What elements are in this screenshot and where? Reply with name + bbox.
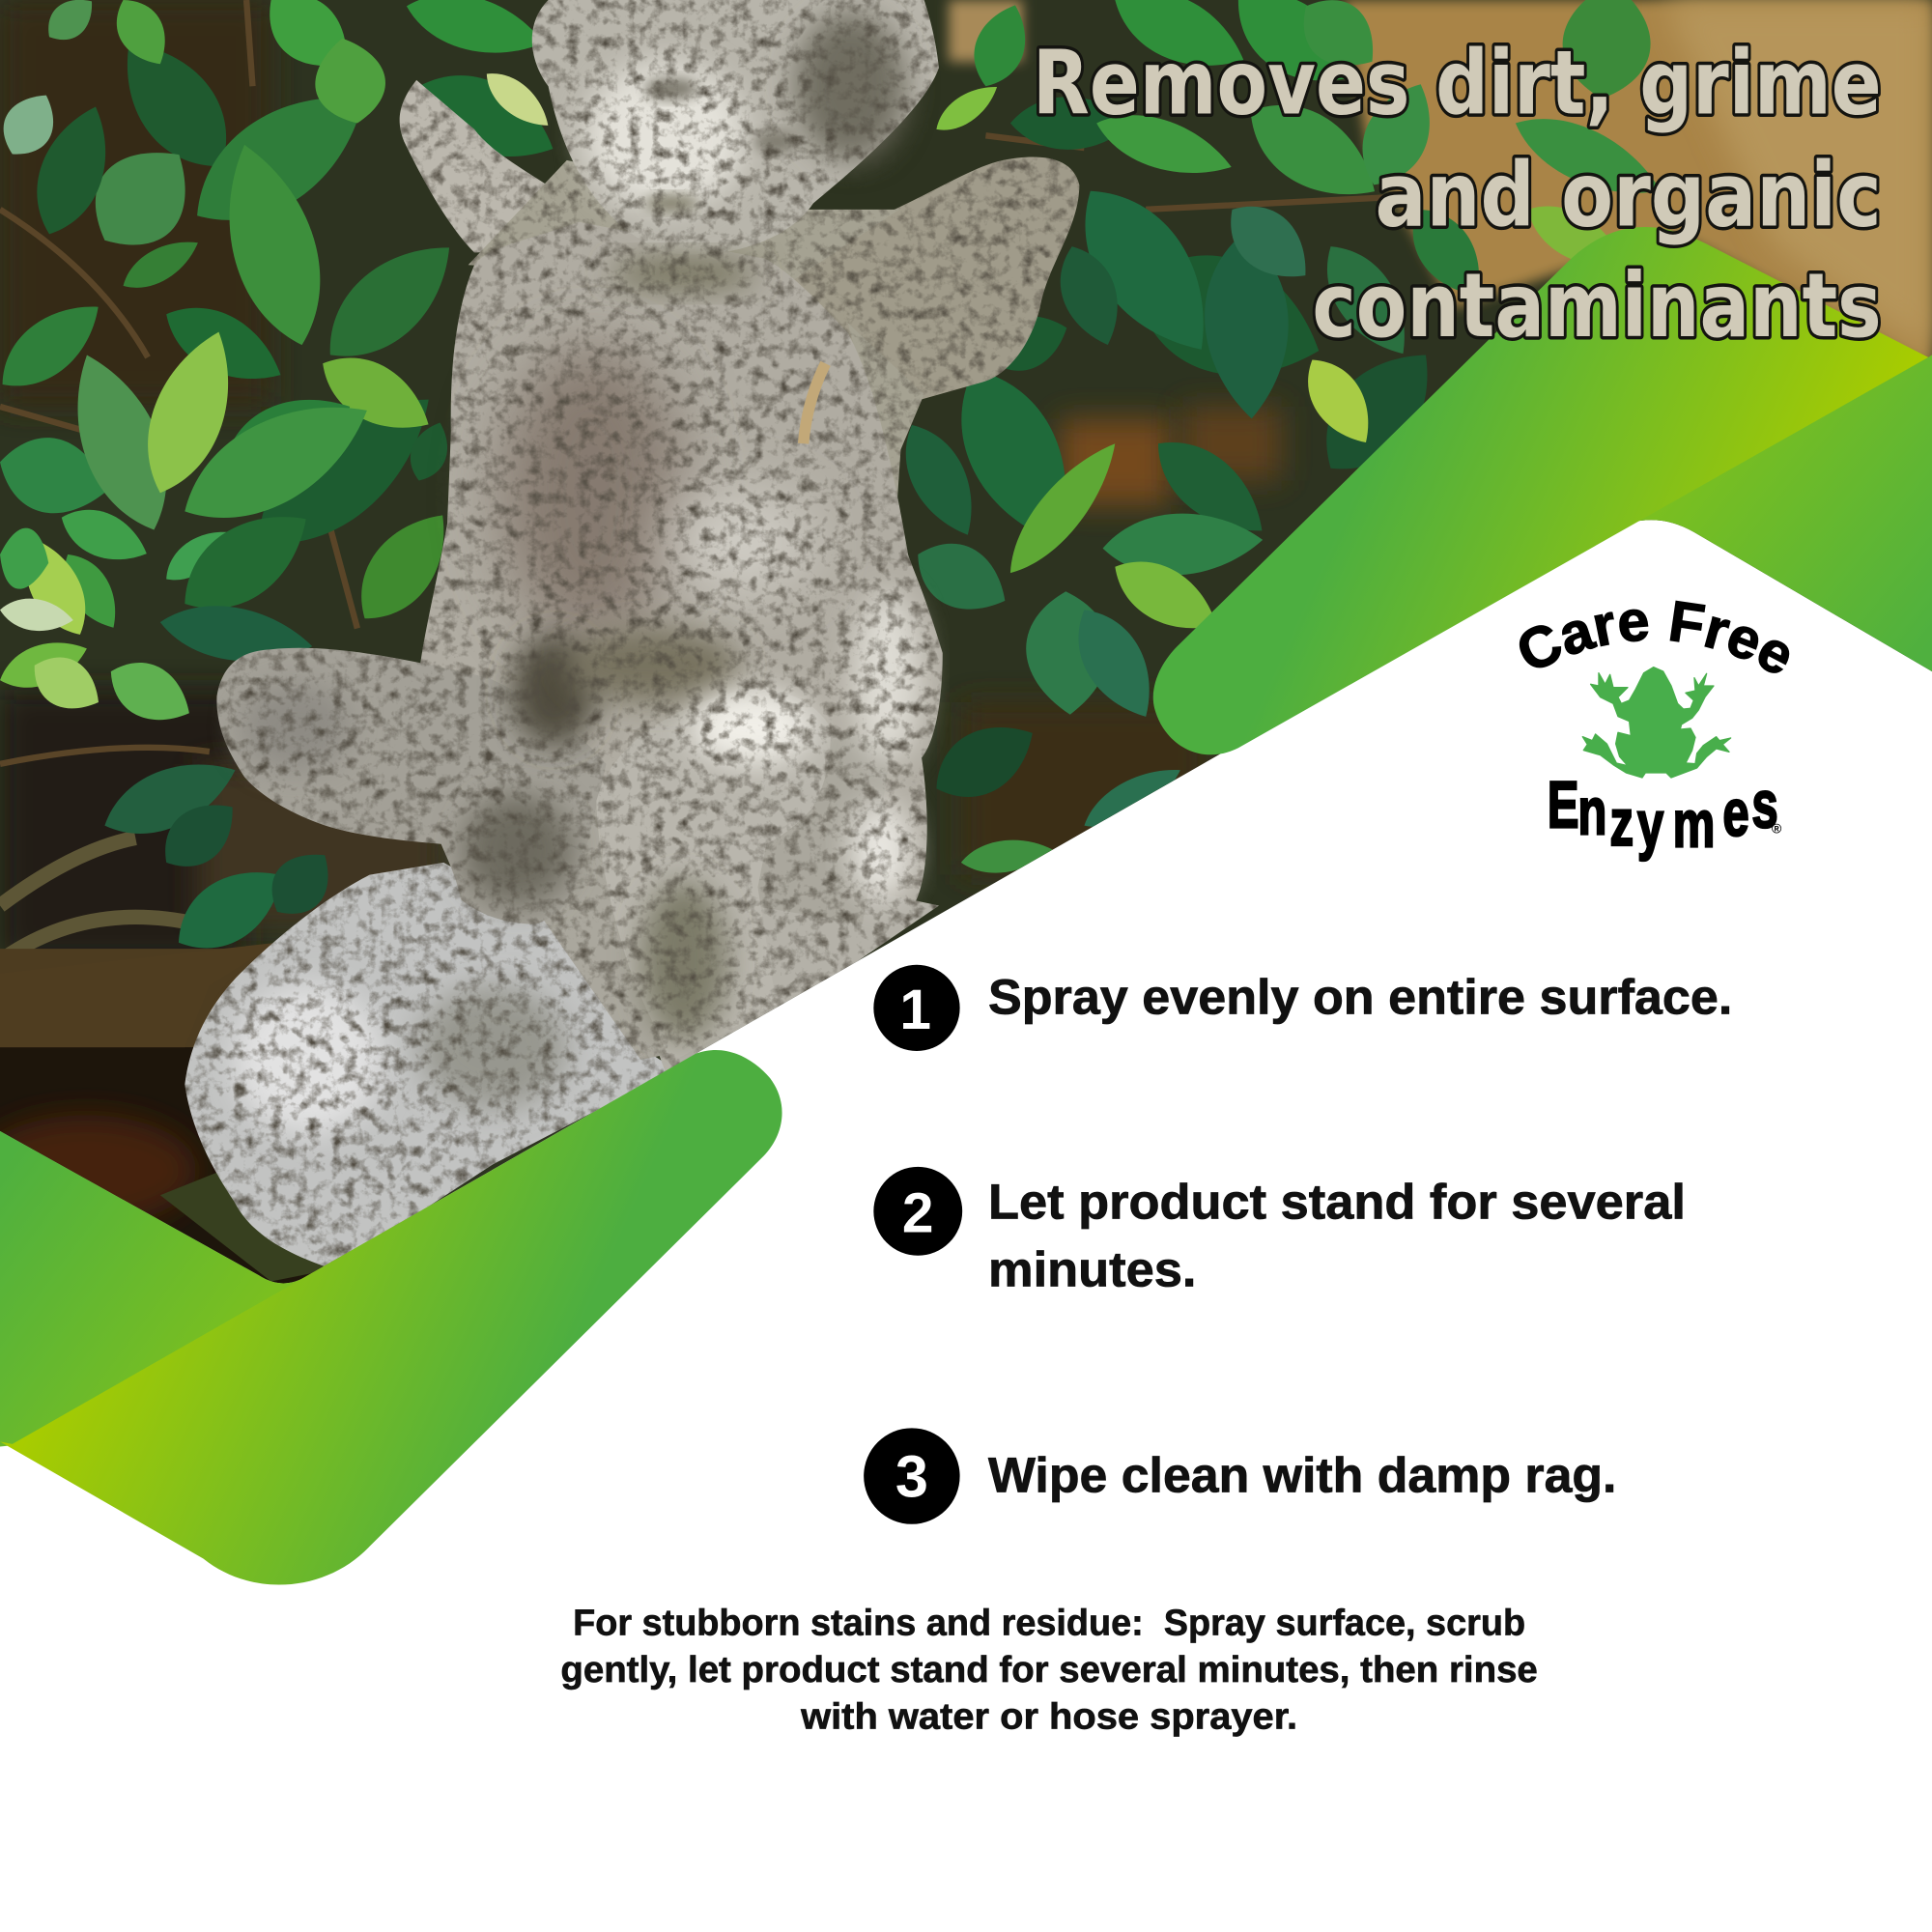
title xyxy=(1033,31,1882,357)
left wing xyxy=(400,80,545,253)
stubborn stains note xyxy=(560,1603,1538,1738)
right wing xyxy=(764,156,1079,446)
step 2 text: Let product stand for several xyxy=(988,1174,1686,1229)
rock between legs xyxy=(545,739,866,1060)
logo text: Enzymes: Enzymes xyxy=(1548,768,1778,862)
basin rim xyxy=(0,943,277,1047)
icon: green frog xyxy=(1582,668,1731,778)
number badge 1 xyxy=(873,965,960,1051)
stubborn stains note: with water or hose sprayer. xyxy=(800,1696,1297,1738)
registered mark: ® xyxy=(1772,821,1782,837)
logo text: Care Free: Care Free xyxy=(1519,601,1789,673)
step 3 text: Wipe clean with damp rag. xyxy=(988,1448,1616,1503)
number badge 3 xyxy=(864,1428,960,1524)
step 2 text: minutes. xyxy=(988,1242,1197,1297)
logo: Care Free Enzymes xyxy=(1519,601,1789,862)
neck and joint fill xyxy=(469,160,924,505)
number 1: 1 xyxy=(899,979,931,1041)
lime green ribbon: top right xyxy=(1153,227,1928,754)
right leg xyxy=(596,690,831,1062)
stubborn stains note: gently, let product stand for several minutes, then rinse xyxy=(560,1649,1538,1690)
number 3: 3 xyxy=(895,1444,928,1510)
step 2 text xyxy=(988,1174,1686,1297)
number badge 2 xyxy=(873,1167,962,1256)
left leg xyxy=(216,648,607,924)
step 1 xyxy=(873,965,1732,1051)
left green band xyxy=(0,1131,370,1446)
torso and arm xyxy=(420,222,943,914)
head xyxy=(532,0,939,254)
rock xyxy=(185,863,675,1269)
leaves xyxy=(0,0,1672,968)
right green band xyxy=(1608,355,1932,671)
background photo: cherub statue among leaves xyxy=(0,0,1932,1355)
shading xyxy=(499,345,684,640)
number 2: 2 xyxy=(902,1182,934,1245)
stubborn stains note: For stubborn stains and residue: Spray surface, scrub xyxy=(573,1603,1525,1644)
step 1 text: Spray evenly on entire surface. xyxy=(988,970,1732,1025)
step 2 xyxy=(873,1167,1686,1297)
cherub statue xyxy=(185,0,1079,1269)
lime green ribbon: bottom left xyxy=(0,1050,782,1585)
step 3 xyxy=(864,1428,1616,1524)
